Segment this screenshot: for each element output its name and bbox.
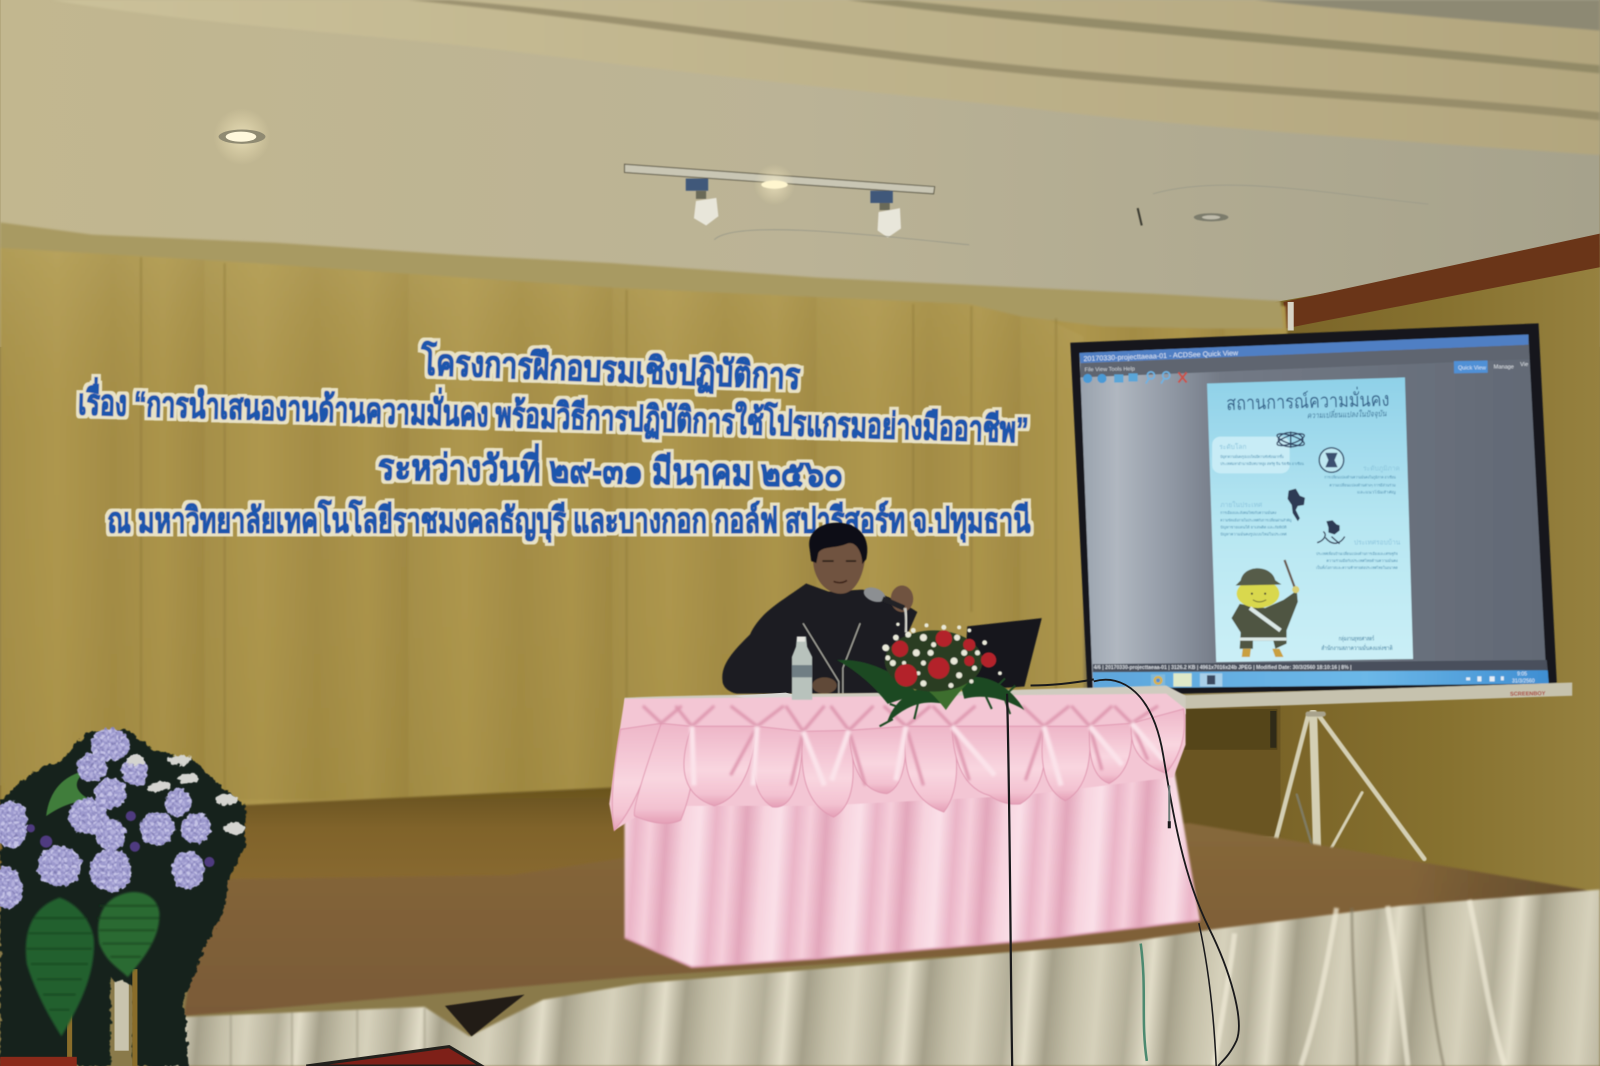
stage cream skirt xyxy=(163,890,1600,1066)
icon: map with orbit xyxy=(1317,520,1345,544)
status bar xyxy=(1093,660,1548,672)
icon: globe xyxy=(1276,431,1306,448)
microphone xyxy=(862,585,906,632)
tripod stand xyxy=(1271,713,1424,859)
left purple flower stand xyxy=(0,728,245,1066)
rosette fold shading xyxy=(643,706,1163,785)
window title text: 20170330-projecttaeaa-01 - ACDSee Quick View xyxy=(1083,349,1239,363)
global level block: ประเทศมหาอำนาจมีบทบาทสูง สหรัฐ จีน รัสเซีย อาเซียน xyxy=(1220,461,1304,466)
regional level block: และแนวโน้มสำคัญ xyxy=(1357,490,1396,495)
hydrangea blooms xyxy=(0,728,211,909)
banner line 4: ณ มหาวิทยาลัยเทคโนโลยีราชมงคลธัญบุรี และบางกอก กอล์ฟ สปารีสอร์ท จ.ปทุมธานี xyxy=(107,498,1031,542)
dark foliage xyxy=(0,729,245,1066)
ceiling downlight xyxy=(213,108,271,165)
presenter xyxy=(722,523,917,694)
taskbar: 31/3/2560 xyxy=(1512,678,1535,684)
table pink swags xyxy=(609,694,1186,830)
window title bar xyxy=(1080,335,1528,363)
red carnations xyxy=(892,630,996,687)
poster credit: กลุ่มงานยุทธศาสตร์ xyxy=(1339,635,1375,643)
dark box under stage edge xyxy=(445,995,525,1036)
stage back wall xyxy=(0,785,1224,908)
banner title text xyxy=(78,339,1031,542)
regional level block: ระดับภูมิภาค xyxy=(1363,464,1400,472)
table top xyxy=(625,686,1186,714)
banner line 2: เรื่อง “การนำเสนองานด้านความมั่นคง พร้อมวิธีการปฏิบัติการใช้โปรแกรมอย่างมืออาชีพ” xyxy=(78,376,1029,450)
icon: Thailand map xyxy=(1288,489,1305,521)
mascot soldier character xyxy=(1232,560,1299,657)
baby's breath dots xyxy=(882,622,1002,688)
projected desktop xyxy=(1080,335,1547,689)
red base xyxy=(0,1057,77,1066)
regional level block: ความเปลี่ยนแปลงด้านต่างๆ การมีส่วนร่วม xyxy=(1329,483,1396,488)
neighbours level block: ประเทศเพื่อนบ้านเปลี่ยนแปลงด้านการเมืองและเศรษฐกิจ xyxy=(1316,551,1398,556)
hand xyxy=(891,586,913,612)
leaf accent xyxy=(46,770,92,816)
poster credit: สำนักงานสภาความมั่นคงแห่งชาติ xyxy=(1321,644,1393,652)
poster credit xyxy=(1321,635,1393,652)
taskbar xyxy=(1093,670,1549,689)
foliage base xyxy=(885,630,983,692)
fern leaves xyxy=(837,660,1024,723)
cream gaps behind stand xyxy=(114,979,129,1051)
banner line 3: ระหว่างวันที่ ๒๙-๓๑ มีนาคม ๒๕๖๐ xyxy=(378,440,843,495)
icon: ASEAN emblem xyxy=(1319,448,1344,472)
regional level block xyxy=(1324,464,1400,495)
quick view tab: Vie xyxy=(1520,362,1528,368)
white sprigs xyxy=(126,755,245,834)
poster xyxy=(1207,377,1413,662)
fern serrations xyxy=(880,678,1015,726)
quick view tab: Quick View xyxy=(1458,365,1487,371)
screen brand label: SCREENBOY xyxy=(1510,691,1546,698)
global level block: ปัญหาความมั่นคงรูปแบบใหม่มีความซับซ้อนมากขึ้น xyxy=(1220,454,1284,459)
papers on table xyxy=(735,693,806,702)
quick view tab xyxy=(1454,361,1528,373)
neighbours level block: ประเทศรอบบ้าน xyxy=(1354,539,1401,547)
regional level block: การเปลี่ยนแปลงด้านความมั่นคงในภูมิภาค อาเซียน xyxy=(1324,474,1396,479)
cables xyxy=(1007,679,1239,1066)
hand on table xyxy=(812,677,837,694)
ceiling beam bands xyxy=(51,0,1600,155)
neighbours level block: เป็นทั้งโอกาสและความท้าทายต่อประเทศไทยในอนาคต xyxy=(1316,564,1398,570)
backdrop curtain xyxy=(0,222,1288,806)
domestic level block: ความขัดแย้งภายในประเทศกับการเปลี่ยนผ่านสำคัญ xyxy=(1220,517,1292,522)
fern fronds xyxy=(26,892,159,1036)
banner line 1: โครงการฝึกอบรมเชิงปฏิบัติการ xyxy=(419,339,801,397)
domestic level block: ปัญหาความมั่นคงรูปแบบใหม่ในประเทศ xyxy=(1220,532,1287,537)
ceiling xyxy=(0,0,1600,347)
side wall behind table xyxy=(1082,704,1280,836)
curtain valance xyxy=(0,222,1284,328)
dark red floor box xyxy=(306,1047,482,1066)
poster subtitle: ความเปลี่ยนแปลงในปัจจุบัน xyxy=(1307,407,1387,421)
toolbar icons xyxy=(1083,372,1187,384)
status bar: 4/6 | 20170330-projecttaeaa-01 | 3126.2 KB | 4961x7016x24b JPEG | Modified Date: 30/3/2560 18:10:16 | 8% | xyxy=(1094,665,1352,671)
right wall with wooden beam xyxy=(1275,234,1600,898)
screen case bar xyxy=(1168,682,1572,709)
water bottle xyxy=(792,637,812,700)
scalloped swag folds xyxy=(612,709,1185,830)
neighbours level block: ความร่วมมือกับประเทศไทยด้านความมั่นคง xyxy=(1326,558,1398,563)
torso in black hoodie xyxy=(722,583,917,694)
neighbours level block xyxy=(1316,539,1401,570)
taskbar: 9:05 xyxy=(1517,671,1527,677)
stage floor carpet xyxy=(184,823,1600,1016)
domestic level block: ปัญหาชายแดนใต้ ยาเสพติด และภัยพิบัติ xyxy=(1220,524,1287,529)
head and hair xyxy=(809,523,867,594)
screen frame xyxy=(1070,323,1557,696)
quick view tab: Manage xyxy=(1494,364,1514,370)
track light rail with spotlights xyxy=(625,164,935,238)
gold stand posts xyxy=(70,969,135,1066)
toolbar xyxy=(1081,345,1529,377)
table flower arrangement xyxy=(837,622,1024,726)
table pink pleated skirt xyxy=(625,765,1200,967)
menu labels: File View Tools Help xyxy=(1085,366,1135,373)
global level block xyxy=(1212,437,1304,473)
dark purple buds xyxy=(27,811,214,867)
ceiling recessed fitting and stains xyxy=(714,185,1428,245)
poster title: สถานการณ์ความมั่นคง xyxy=(1226,386,1390,415)
domestic level block: การเมืองและสังคมไทยกับความมั่นคง xyxy=(1220,510,1277,515)
domestic level block xyxy=(1220,501,1292,537)
global level block: ระดับโลก xyxy=(1219,443,1247,451)
projector screen xyxy=(1070,323,1572,709)
hoodie zip lines xyxy=(803,623,860,694)
domestic level block: ภายในประเทศ xyxy=(1220,501,1263,509)
laptop xyxy=(963,618,1042,691)
